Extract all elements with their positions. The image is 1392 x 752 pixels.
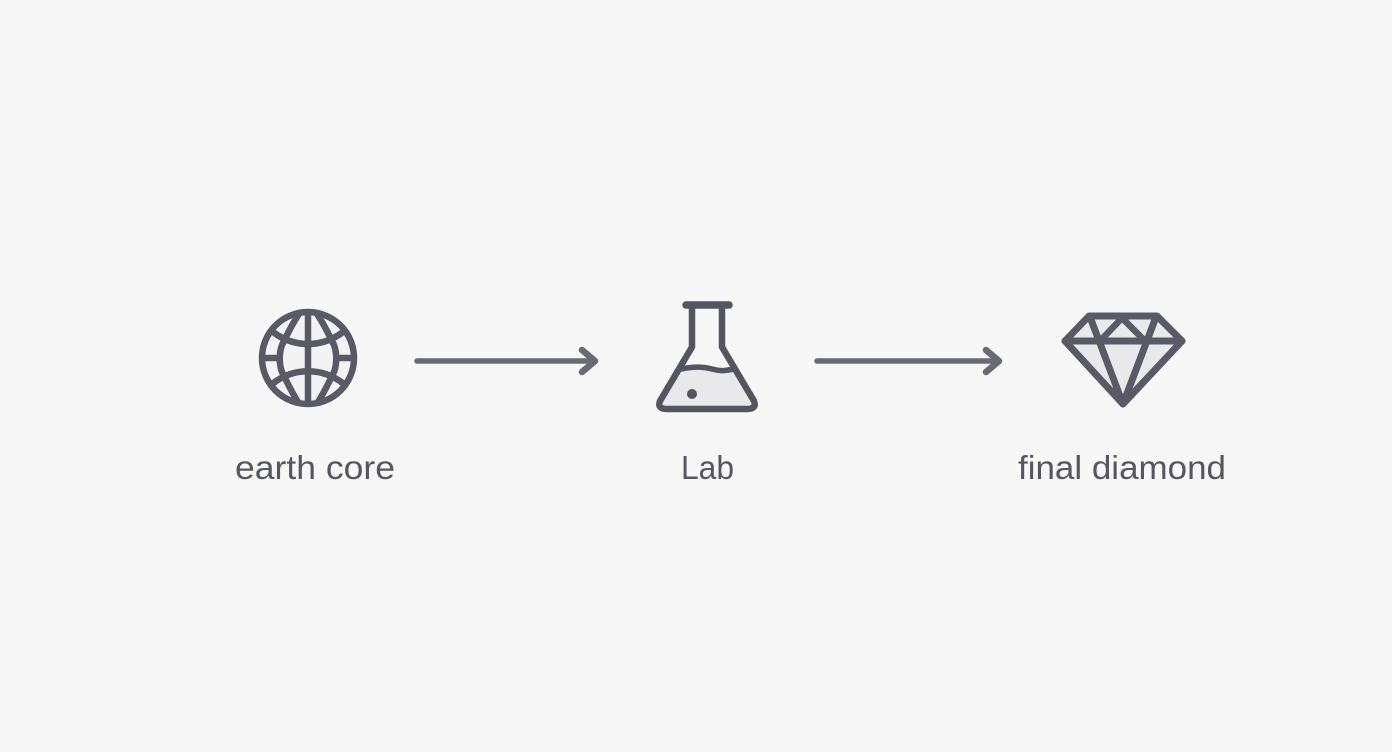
label: earth core: earth core (235, 449, 395, 486)
icon: flask (lab) (659, 305, 755, 409)
icon: diamond (final diamond) (1065, 316, 1182, 404)
label: final diamond: final diamond (1018, 449, 1226, 486)
icon: globe (earth core) (262, 312, 354, 404)
arrow: earth core to lab (417, 350, 595, 372)
label: Lab: Lab (681, 449, 734, 486)
arrow: lab to final diamond (817, 350, 999, 372)
